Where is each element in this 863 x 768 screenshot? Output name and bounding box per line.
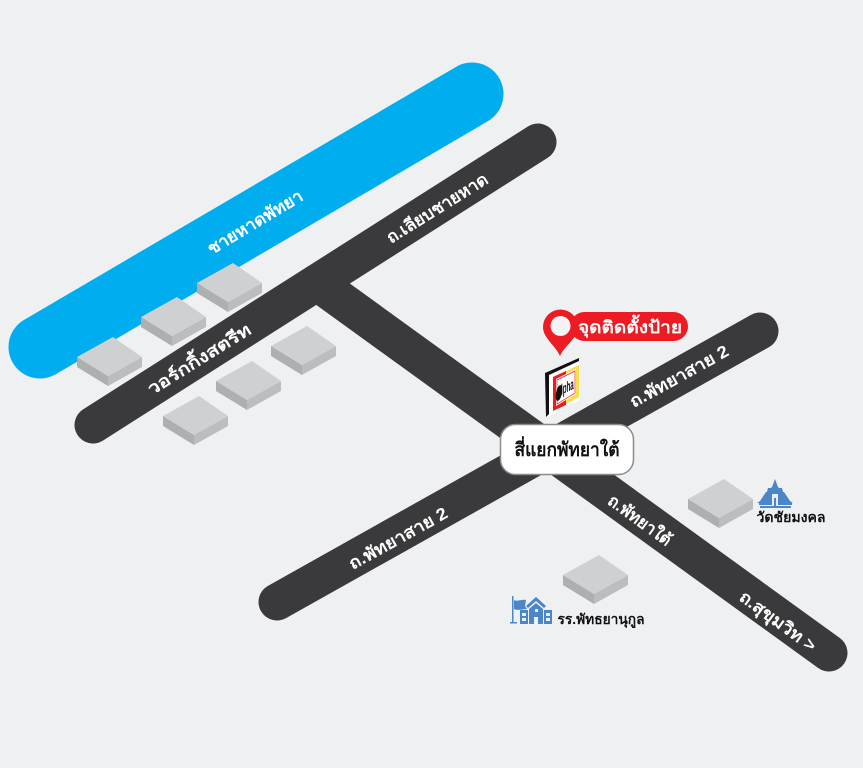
junction label: สี่แยกพัทยาใต้ [514,436,620,461]
label: Pattaya Sai 2 upper: ถ.พัทยาสาย 2 [627,341,732,411]
building 1 [77,337,142,386]
label: beach road: ถ.เลียบชายหาด [383,169,491,247]
road: beach [40,94,472,347]
sign: Alpha: lpha [561,376,574,399]
road: Beach Road and Walking Street [93,142,538,425]
label: Sukhumvit: ถ.สุขุมวิท > [735,587,820,656]
building 5 [216,361,281,410]
road: Pattaya Tai and Sukhumvit [317,283,829,653]
icon: school [510,596,552,624]
building 4 [271,326,336,375]
label: temple: วัดชัยมงคล [756,509,826,525]
building 3 [197,263,262,312]
building 2 [141,297,206,346]
location marker [543,310,688,356]
label: Pattaya Tai: ถ.พัทยาใต้ [604,490,676,550]
sign: Alpha [545,358,580,417]
marker pin [543,310,578,356]
label: walking street: วอร์กกิ้งสตรีท [142,317,254,399]
road: Pattaya Sai 2 [277,331,760,602]
marker text: จุดติดตั้งป้าย [578,314,682,338]
junction label [500,424,634,474]
label: school: รร.พัทธยานุกูล [558,611,644,628]
icon: temple [757,479,793,508]
label: beach: ชายหาดพัทยา [204,186,306,258]
building 6 [163,396,228,445]
label: Pattaya Sai 2 lower: ถ.พัทยาสาย 2 [346,503,451,573]
building: temple [688,479,753,528]
building: school [563,555,628,604]
marker label pill [570,312,688,341]
marker hole [550,316,570,336]
